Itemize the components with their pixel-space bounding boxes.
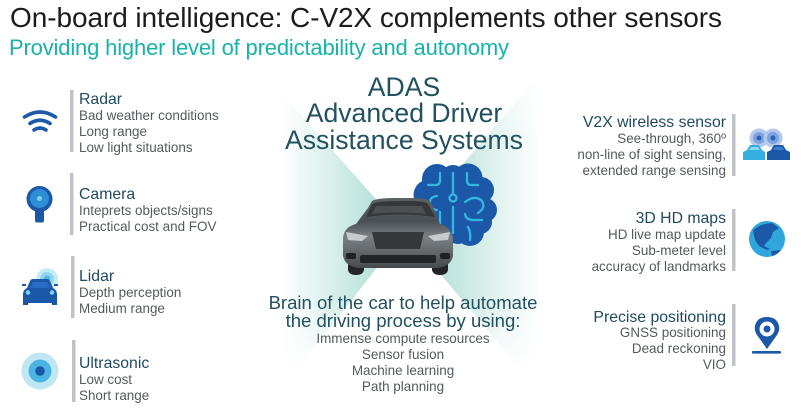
icon: camera [26,186,52,222]
icon: car front view [343,198,453,275]
panel: V2X wireless sensor: non-line of sight sensing, [577,147,726,162]
panel: 3D HD maps [592,209,785,274]
panel: V2X wireless sensor [577,114,790,178]
panel: Radar: Radar [79,91,122,108]
panel: 3D HD maps: Sub-meter level [632,243,726,258]
panel: V2X wireless sensor: V2X wireless sensor [583,114,726,131]
icon: ultrasonic rings [22,352,58,390]
panel: Camera: Inteprets objects/signs [79,203,213,218]
panel: 3D HD maps: HD live map update [608,227,726,242]
panel: Ultrasonic: Ultrasonic [79,355,149,372]
icon: location pin [752,317,781,354]
panel: Lidar: Medium range [79,301,165,316]
heading: ADAS: ADAS [368,72,440,102]
background: light wedge rays [270,76,545,377]
subtitle: Providing higher level of predictability and autonomy [9,35,509,60]
icon: two connected cars [743,128,790,160]
icon: lidar car [22,268,58,305]
heading: ADAS: Advanced Driver [306,98,502,128]
panel: 3D HD maps: accuracy of landmarks [592,259,726,274]
panel: 3D HD maps: 3D HD maps [636,210,726,227]
text: brain of the car: Path planning [362,379,444,394]
panel: Radar: Low light situations [79,140,193,155]
panel: Ultrasonic: Short range [79,388,149,403]
panel: Camera: Practical cost and FOV [79,219,216,234]
panel: Camera [26,173,216,235]
text: brain of the car: Brain of the car to help automate [269,292,537,313]
panel: Lidar: Depth perception [79,285,181,300]
panel: Radar: Long range [79,124,147,139]
heading: ADAS: Assistance Systems [285,125,523,155]
icon: globe [749,221,785,257]
text: brain of the car [269,292,537,394]
panel: Camera: Camera [79,186,135,203]
panel: Precise positioning: Precise positioning [593,309,726,326]
panel: Precise positioning [593,304,781,372]
panel: V2X wireless sensor: See-through, 360º [617,131,726,146]
panel: Ultrasonic: Low cost [79,372,132,387]
panel: Precise positioning: Dead reckoning [632,341,726,356]
panel: Precise positioning: GNSS positioning [620,325,726,340]
panel: Lidar: Lidar [79,268,114,285]
panel: Precise positioning: VIO [703,357,726,372]
text: brain of the car: Immense compute resources [316,331,490,346]
heading: ADAS [285,72,523,155]
title: On-board intelligence: C-V2X complements other sensors [10,2,722,33]
text: brain of the car: Machine learning [352,363,454,378]
panel: Ultrasonic [22,340,149,403]
icon: brain [414,164,497,246]
icon: radar waves [24,112,56,130]
panel: Radar: Bad weather conditions [79,108,219,123]
text: brain of the car: the driving process by using: [286,310,520,331]
panel: Lidar [22,256,181,318]
panel: Radar [24,90,219,155]
text: brain of the car: Sensor fusion [362,347,444,362]
panel: V2X wireless sensor: extended range sensing [583,163,726,178]
